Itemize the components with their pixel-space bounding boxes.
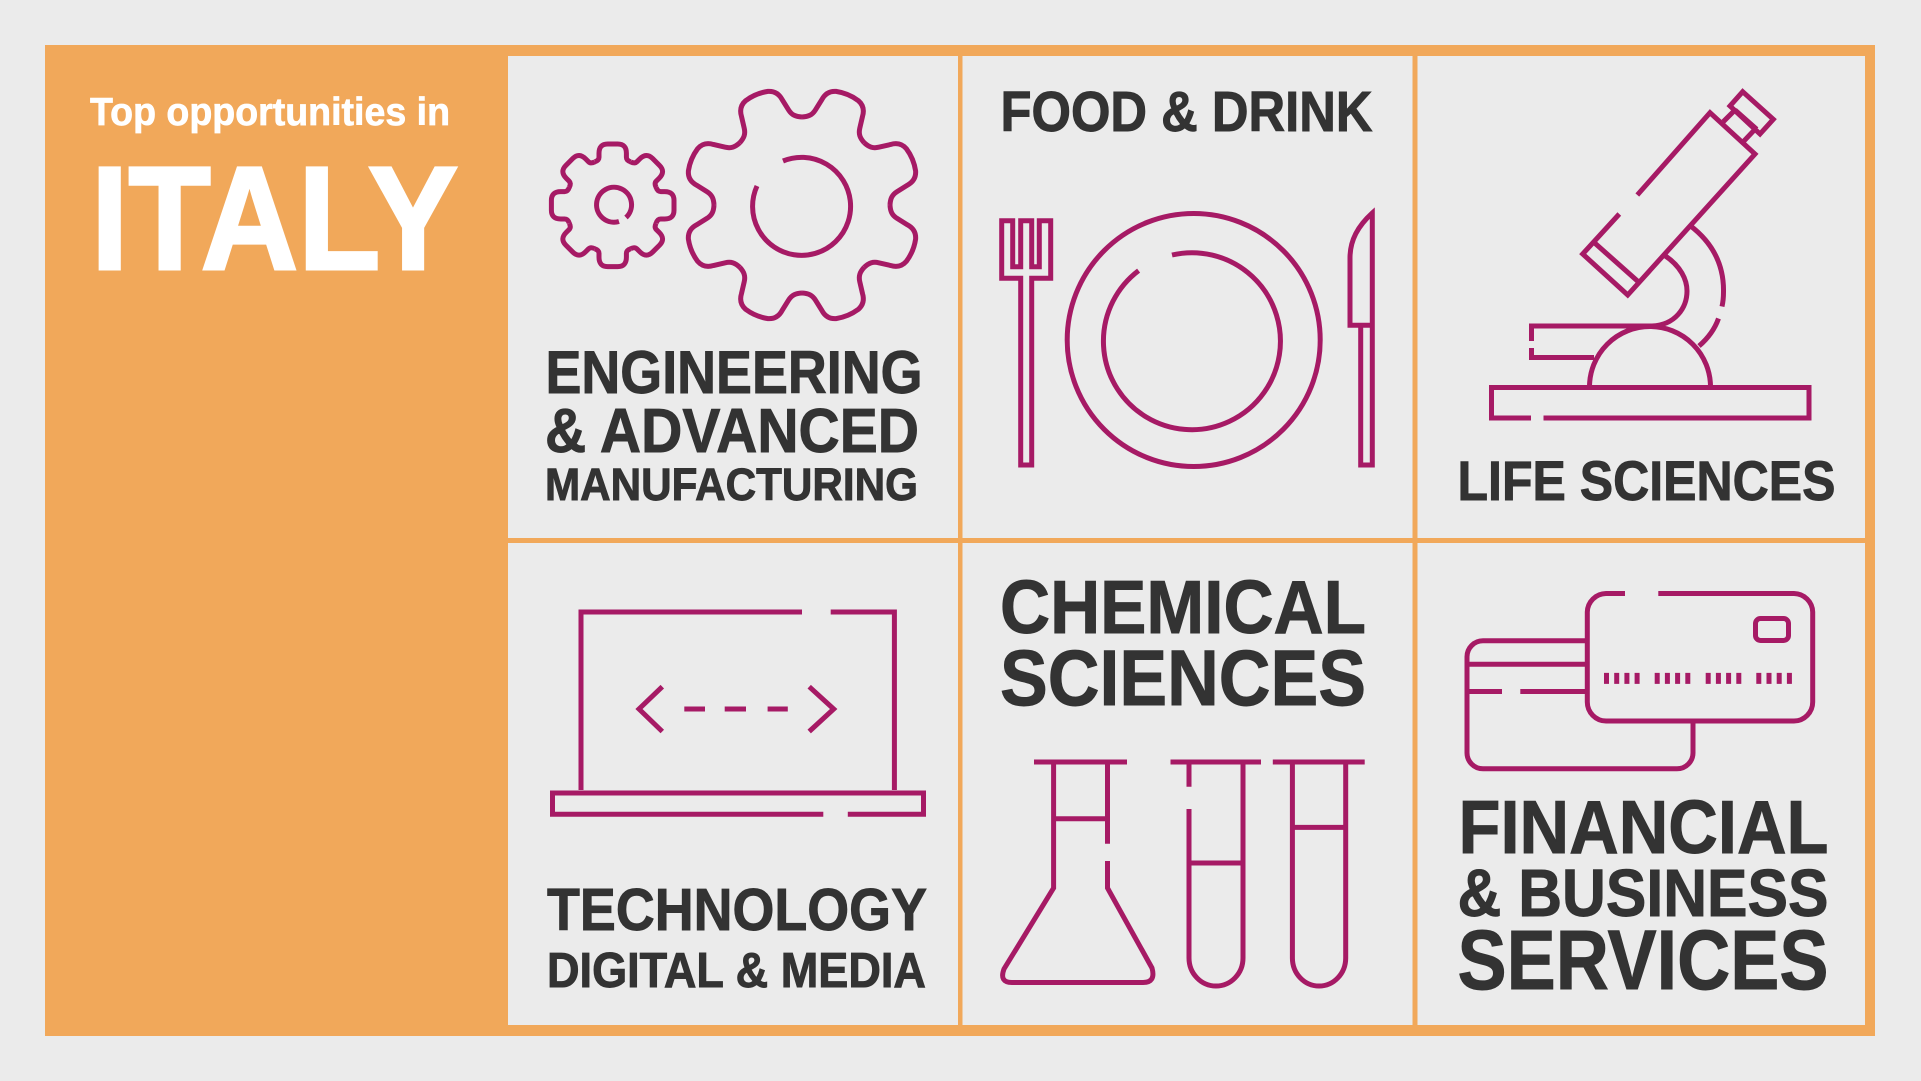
heading: Italy: ITALY <box>91 137 458 301</box>
icon: test tube one <box>1170 762 1261 986</box>
panel: title <box>90 91 458 301</box>
label: chemical sciences: CHEMICAL <box>1000 565 1366 649</box>
icon: microscope <box>1492 92 1809 418</box>
icon: flask <box>1003 762 1153 982</box>
icon: front card <box>1587 594 1813 721</box>
icon: gears <box>551 82 925 328</box>
label: technology, digital and media: DIGITAL & MEDIA <box>547 944 926 998</box>
label: engineering and advanced manufacturing <box>545 339 922 510</box>
label: chemical sciences: SCIENCES <box>1000 633 1366 722</box>
label: financial and business services: SERVICES <box>1458 913 1828 1007</box>
label: financial and business services <box>1458 785 1828 1007</box>
icon: plate <box>1067 214 1320 466</box>
icon: large gear <box>679 82 925 328</box>
icon: flask and test tubes <box>1003 762 1365 986</box>
panel: engineering and advanced manufacturing <box>508 56 958 538</box>
icon: fork <box>1002 221 1051 465</box>
icon: small gear <box>551 144 674 267</box>
icon: plate and cutlery <box>1002 213 1372 466</box>
subtitle: Top opportunities in <box>90 91 450 134</box>
label: engineering and advanced manufacturing: & ADVANCED <box>545 397 919 466</box>
icon: test tube two <box>1273 762 1365 986</box>
label: financial and business services: & BUSINESS <box>1458 856 1828 931</box>
icon: back card <box>1467 641 1693 769</box>
label: engineering and advanced manufacturing: MANUFACTURING <box>545 459 918 510</box>
label: technology, digital and media <box>547 877 927 998</box>
icon: credit cards <box>1467 594 1813 769</box>
label: life sciences: LIFE SCIENCES <box>1458 449 1836 512</box>
icon: laptop with code <box>552 612 924 814</box>
icon: knife <box>1350 213 1372 465</box>
panel: life sciences <box>1418 56 1865 538</box>
panel: food and drink <box>962 56 1412 538</box>
panel: financial and business services <box>1418 543 1865 1025</box>
label: chemical sciences <box>1000 565 1366 722</box>
label: technology, digital and media: TECHNOLOGY <box>547 877 927 943</box>
label: financial and business services: FINANCIAL <box>1458 785 1828 869</box>
label: engineering and advanced manufacturing: ENGINEERING <box>546 339 922 406</box>
panel: technology, digital and media <box>508 543 958 1025</box>
label: food and drink: FOOD & DRINK <box>1000 80 1372 144</box>
panel: chemical sciences <box>962 543 1412 1025</box>
